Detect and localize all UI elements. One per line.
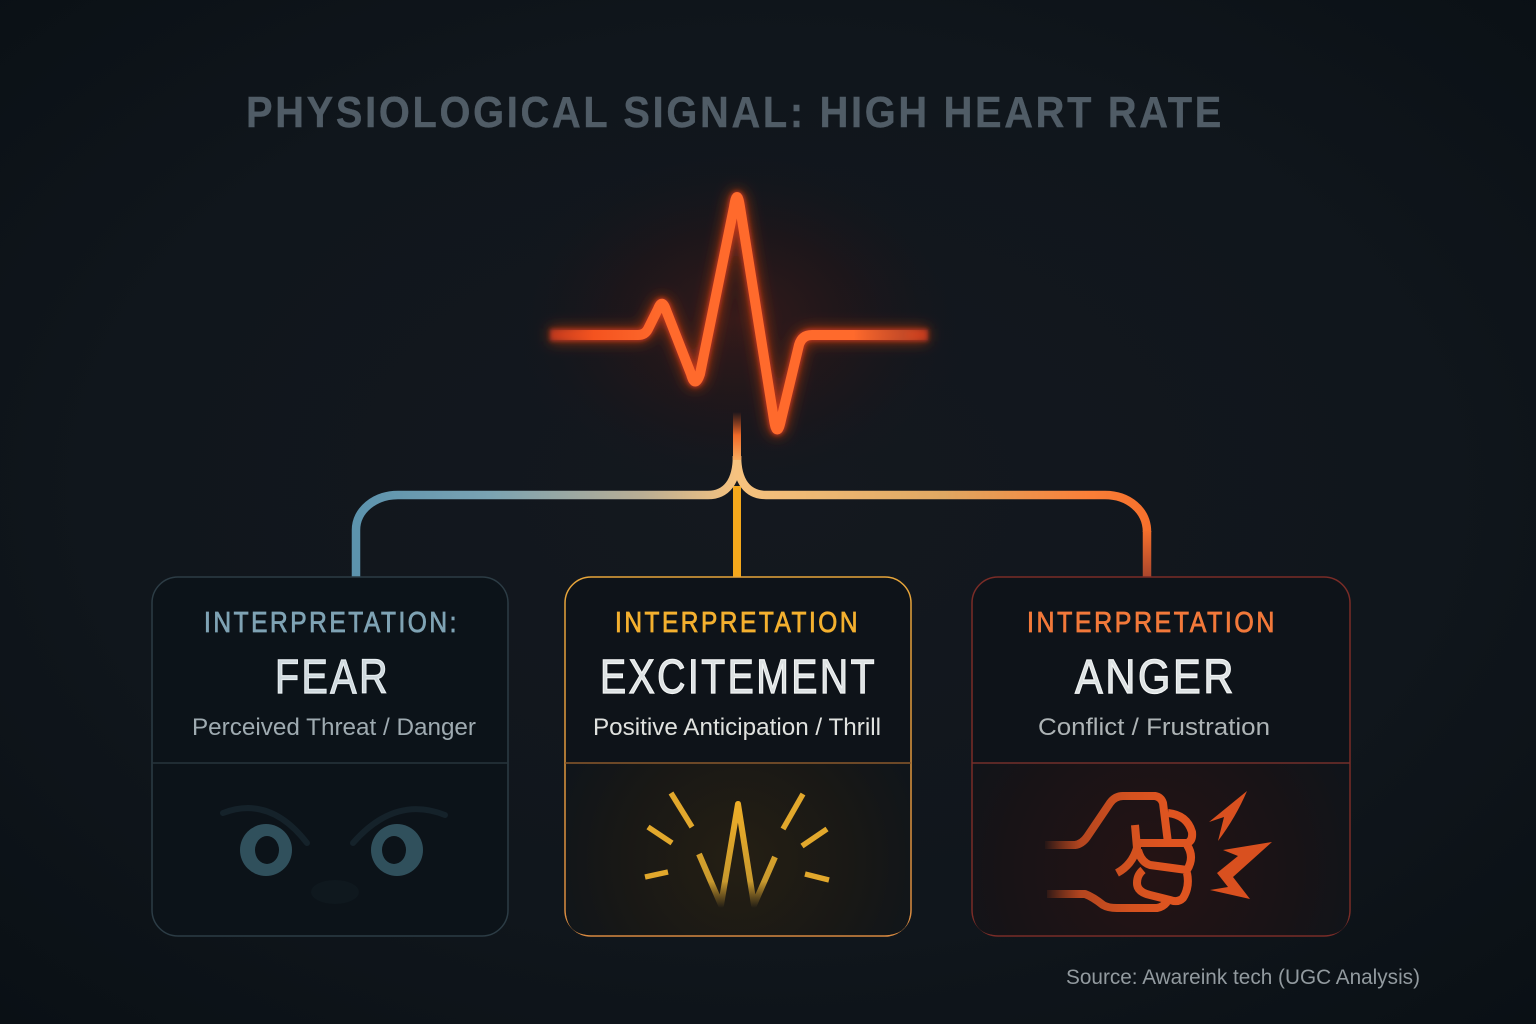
- fear label: INTERPRETATION:: [204, 607, 459, 639]
- excitement label: INTERPRETATION: [615, 607, 860, 639]
- excitement heading: EXCITEMENT: [600, 651, 877, 704]
- icon: burst: [645, 793, 829, 905]
- connector end to anger: [1143, 531, 1151, 577]
- connector stem: [733, 412, 741, 460]
- fear heading: FEAR: [275, 651, 390, 704]
- icon: wide eyes: [223, 808, 445, 904]
- fear description: Perceived Threat / Danger: [192, 714, 476, 741]
- branching connector: [356, 412, 1147, 577]
- connector to anger: [737, 456, 1147, 532]
- panel: anger: [972, 577, 1350, 936]
- icon: fist with impact bolts: [1045, 791, 1272, 908]
- source note: Source: Awareink tech (UGC Analysis): [1066, 966, 1420, 989]
- anger label: INTERPRETATION: [1027, 607, 1277, 639]
- heartbeat ECG line: [502, 145, 972, 495]
- excitement description: Positive Anticipation / Thrill: [593, 714, 881, 741]
- connector to excitement: [733, 486, 741, 577]
- connector to fear: [356, 456, 737, 577]
- panel: fear: [152, 577, 508, 936]
- anger description: Conflict / Frustration: [1038, 714, 1270, 741]
- title: PHYSIOLOGICAL SIGNAL: HIGH HEART RATE: [246, 88, 1224, 137]
- anger heading: ANGER: [1075, 651, 1236, 704]
- panel: excitement: [565, 577, 911, 936]
